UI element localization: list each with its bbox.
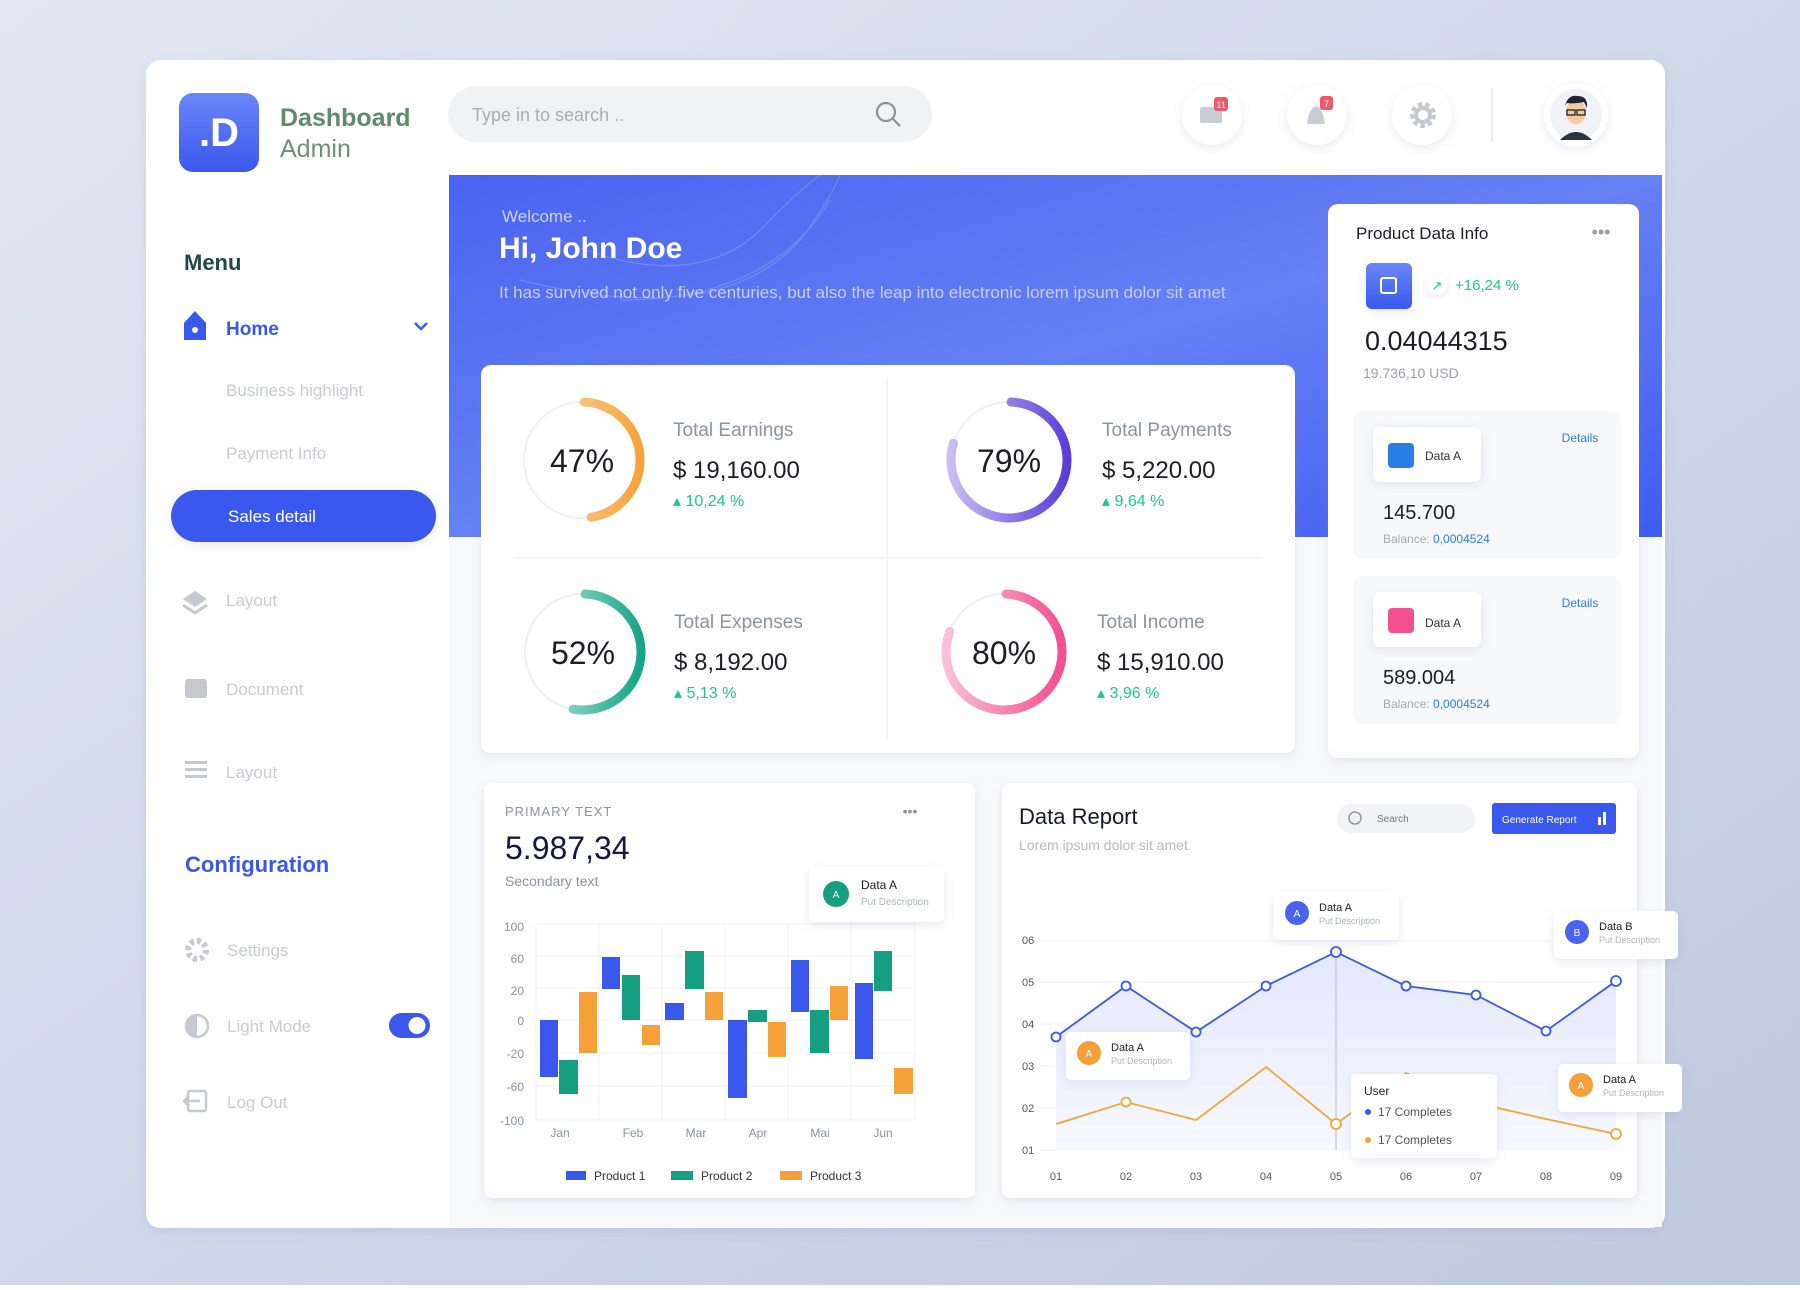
legend [566, 1169, 862, 1183]
menu item: home [184, 311, 427, 340]
logo: Admin [280, 135, 351, 163]
sales detail button [171, 490, 436, 542]
tooltip: user [1351, 1074, 1497, 1158]
logo [179, 93, 411, 172]
welcome banner: Welcome .. [502, 207, 587, 226]
icon: bell: 7 [1324, 99, 1329, 109]
stat: total payments: ▴ 9,64 % [1102, 493, 1164, 510]
sub card: data A 1 [1353, 411, 1621, 559]
sub card: data A 1: Data A [1425, 449, 1461, 463]
line chart: 03 [1022, 1061, 1034, 1073]
menu item: home: Home [226, 319, 279, 340]
search pill: Search [1377, 814, 1409, 825]
sub card: data A 1: Balance: 0,0004524 [1383, 532, 1490, 546]
sidebar menu: Layout [226, 591, 277, 610]
sidebar menu: Document [226, 680, 304, 699]
tooltip: user: 17 Completes [1378, 1133, 1452, 1147]
line chart: 03 [1190, 1171, 1202, 1183]
line chart: 01 [1050, 1171, 1062, 1183]
tooltip: data A top [1274, 892, 1399, 940]
tooltip: data A top: A [1294, 909, 1301, 920]
panel: bar chart card: 5.987,34 [505, 830, 630, 866]
icon: image [1366, 263, 1412, 309]
line chart: 09 [1610, 1171, 1622, 1183]
stat: total payments [949, 400, 1232, 520]
line chart: 04 [1022, 1019, 1034, 1031]
stat: total payments: $ 5,220.00 [1102, 457, 1215, 484]
welcome banner [449, 175, 1662, 537]
tooltip: data A top: Data A [1319, 902, 1353, 914]
panel: product data info: ••• [1592, 222, 1610, 242]
stat: total expenses: $ 8,192.00 [674, 649, 787, 676]
logo: .D [199, 111, 239, 155]
generate report button: Generate Report [1502, 815, 1577, 826]
tooltip: data A right: Data A [1603, 1074, 1637, 1086]
bar chart [500, 920, 915, 1140]
panel: product data info: Product Data Info [1356, 224, 1488, 243]
tooltip: data A right: A [1578, 1081, 1585, 1092]
line chart: 05 [1022, 977, 1034, 989]
sidebar menu: Light Mode [227, 1017, 311, 1036]
panel: product data info: +16,24 % [1455, 277, 1519, 294]
line chart: 02 [1022, 1103, 1034, 1115]
stat: total payments: Total Payments [1102, 420, 1232, 441]
panel: data report [1002, 783, 1682, 1198]
stat: total income: ▴ 3,96 % [1097, 685, 1159, 702]
stat: total earnings: ▴ 10,24 % [673, 493, 744, 510]
line chart [1022, 935, 1622, 1183]
panel: bar chart card [484, 783, 975, 1198]
panel: product data info [1328, 204, 1639, 758]
tooltip: data B: Put Description [1599, 935, 1660, 945]
tooltip: data A [809, 867, 944, 922]
legend: Product 1 [594, 1169, 646, 1183]
stat: total earnings [522, 400, 800, 520]
tooltip: data B: B [1574, 928, 1581, 939]
sub card: data A 2 [1353, 576, 1621, 724]
icon: settings [1392, 85, 1452, 145]
tooltip: data A left [1066, 1032, 1190, 1080]
line chart: 07 [1470, 1171, 1482, 1183]
generate report button [1492, 803, 1616, 834]
stat: total income: Total Income [1097, 612, 1205, 633]
sub card: data A 1: 145.700 [1383, 502, 1455, 524]
bar chart: Apr [749, 1126, 767, 1140]
stat: total expenses: Total Expenses [674, 612, 803, 633]
line chart: 02 [1120, 1171, 1132, 1183]
tooltip: data A: Put Description [861, 897, 929, 908]
avatar [1544, 83, 1608, 147]
stats card [481, 365, 1295, 753]
line chart: 08 [1540, 1171, 1552, 1183]
icon: mail: 11 [1216, 100, 1226, 110]
tooltip: user: 17 Completes [1378, 1105, 1452, 1119]
bar chart: -100 [500, 1114, 524, 1128]
icon: bell [1287, 85, 1347, 145]
bar chart: 100 [504, 920, 524, 934]
tooltip: data A left: Put Description [1111, 1056, 1172, 1066]
sub card: data A 2: 589.004 [1383, 667, 1455, 689]
panel: data report: Data Report [1019, 804, 1138, 829]
panel: bar chart card: PRIMARY TEXT [505, 804, 612, 819]
bar chart: 60 [511, 952, 524, 966]
tooltip: data A left: A [1086, 1049, 1093, 1060]
sub card: data A 2: Balance: 0,0004524 [1383, 697, 1490, 711]
logo: Dashboard [280, 104, 411, 132]
tooltip: data A left: Data A [1111, 1042, 1145, 1054]
bar chart: Feb [623, 1126, 644, 1140]
sub card: data A 2: Details [1562, 596, 1598, 610]
stat: total expenses [523, 592, 803, 712]
stat: total expenses: 52% [551, 635, 615, 671]
sidebar menu: Settings [227, 941, 288, 960]
welcome banner: Hi, John Doe [499, 232, 682, 265]
panel: product data info: 19.736,10 USD [1363, 365, 1459, 381]
panel: product data info: 0.04044315 [1365, 326, 1508, 356]
search bar: Type in to search .. [472, 105, 624, 125]
legend: Product 2 [701, 1169, 753, 1183]
stat: total income: 80% [972, 635, 1036, 671]
icon: mail [1182, 85, 1242, 145]
sidebar menu: Business highlight [226, 381, 363, 400]
bar chart: -60 [507, 1080, 524, 1094]
line chart: 05 [1330, 1171, 1342, 1183]
stat: total earnings: Total Earnings [673, 420, 793, 441]
bar chart: Jun [873, 1126, 893, 1140]
stat: total earnings: 47% [550, 443, 614, 479]
panel: product data info: ↗ [1432, 278, 1442, 293]
sales detail button: Sales detail [228, 507, 316, 526]
panel: bar chart card: ••• [903, 803, 917, 819]
tooltip: data A right [1558, 1064, 1682, 1112]
tooltip: user: User [1364, 1084, 1389, 1098]
stat: total income [944, 592, 1224, 712]
sidebar menu: Menu [184, 250, 241, 275]
main panel [146, 60, 1665, 1228]
bar chart: Mai [810, 1126, 830, 1140]
sidebar menu [171, 250, 436, 1112]
tooltip: data A: A [833, 890, 840, 901]
sidebar menu: Log Out [227, 1093, 288, 1112]
bar chart: -20 [507, 1047, 524, 1061]
sub card: data A 1: Details [1562, 431, 1598, 445]
panel: bar chart card: Secondary text [505, 873, 598, 889]
legend: Product 3 [810, 1169, 862, 1183]
bar chart: 20 [511, 984, 524, 998]
line chart: 06 [1022, 935, 1034, 947]
tooltip: data B [1554, 911, 1678, 959]
sub card: data A 2: Data A [1425, 616, 1461, 630]
sidebar menu: Layout [226, 763, 277, 782]
tooltip: data A right: Put Description [1603, 1088, 1664, 1098]
line chart: 06 [1400, 1171, 1412, 1183]
welcome banner: It has survived not only five centuries, but also the leap into electronic lorem ipsum dolor sit amet [499, 283, 1226, 302]
search pill [1337, 804, 1475, 833]
line chart: 01 [1022, 1145, 1034, 1157]
tooltip: data A: Data A [861, 878, 897, 892]
stat: total earnings: $ 19,160.00 [673, 457, 800, 484]
panel: data report: Lorem ipsum dolor sit amet [1019, 837, 1188, 853]
bar chart: Jan [550, 1126, 570, 1140]
line chart: 04 [1260, 1171, 1272, 1183]
tooltip: data A top: Put Description [1319, 916, 1380, 926]
sidebar menu: Payment Info [226, 444, 326, 463]
tooltip: data B: Data B [1599, 921, 1633, 933]
stat: total expenses: ▴ 5,13 % [674, 685, 736, 702]
search bar [448, 86, 932, 142]
bar chart: 0 [517, 1014, 524, 1028]
bar chart: Mar [686, 1126, 706, 1140]
toggle [389, 1013, 430, 1038]
stat: total income: $ 15,910.00 [1097, 649, 1224, 676]
sidebar menu: Configuration [185, 852, 329, 877]
stat: total payments: 79% [977, 443, 1041, 479]
